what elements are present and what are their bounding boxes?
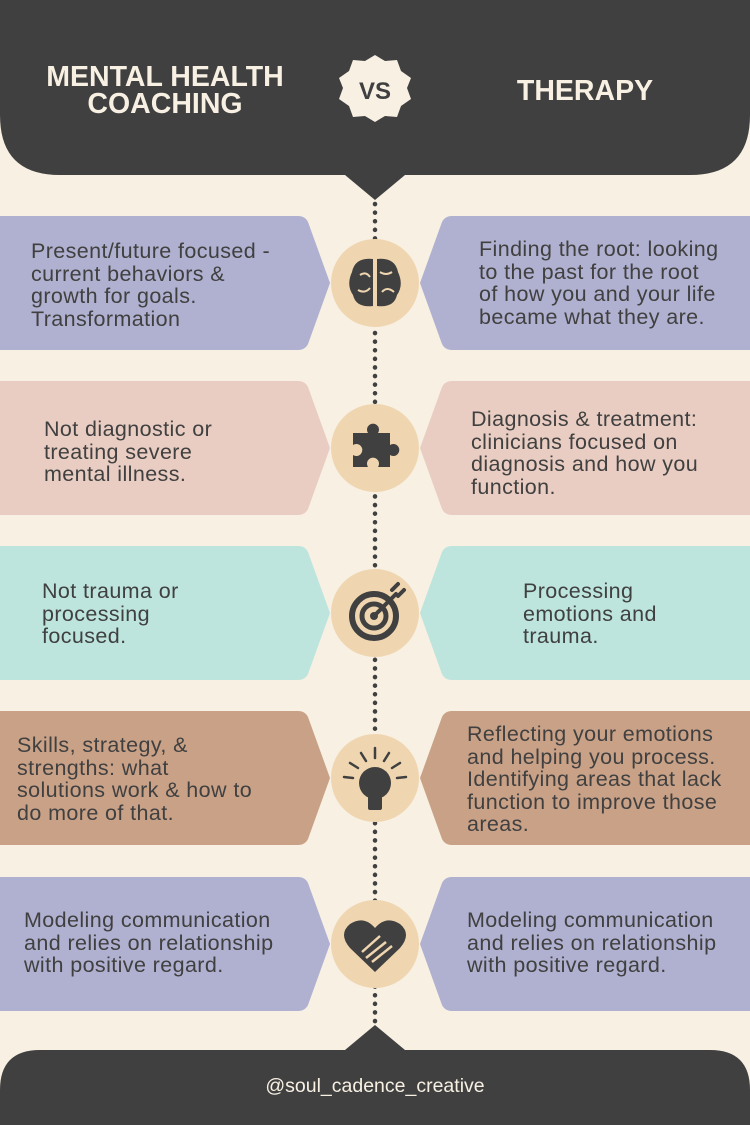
row4 left text: strengths: what xyxy=(17,756,169,780)
row2 right text: diagnosis and how you xyxy=(471,452,698,476)
row1 left text xyxy=(31,239,270,330)
row1 right text: Finding the root: looking xyxy=(479,237,718,261)
timeline dots xyxy=(373,204,377,1028)
vs badge: VS xyxy=(359,78,391,105)
row3 right text: Processing xyxy=(523,579,633,603)
row4 left text xyxy=(17,733,252,824)
row1 right text: became what they are. xyxy=(479,304,705,328)
row4 right text: Identifying areas that lack xyxy=(467,767,722,791)
row1 right text: of how you and your life xyxy=(479,282,716,306)
footer panel xyxy=(0,1025,750,1125)
vs badge xyxy=(339,55,411,122)
row2 right text: clinicians focused on xyxy=(471,430,678,454)
row3 right text: trauma. xyxy=(523,624,599,648)
title left xyxy=(46,61,284,120)
row3 left text: focused. xyxy=(42,624,126,648)
row2 panels xyxy=(0,381,750,515)
row5 right text xyxy=(467,908,716,977)
icon: puzzle xyxy=(331,404,419,492)
row5 right text: with positive regard. xyxy=(467,953,667,977)
row4 left text: do more of that. xyxy=(17,800,174,824)
row3 panels xyxy=(0,546,750,680)
row1 left text: Present/future focused - xyxy=(31,239,270,263)
row4 left text: Skills, strategy, & xyxy=(17,733,188,757)
row4 right text: Reflecting your emotions xyxy=(467,722,713,746)
row1 left text: current behaviors & xyxy=(31,262,225,286)
row4 panels xyxy=(0,711,750,845)
row2 right text: Diagnosis & treatment: xyxy=(471,407,697,431)
row1 right text xyxy=(479,237,718,328)
icon: target xyxy=(331,569,419,657)
row5 right text: Modeling communication xyxy=(467,908,714,932)
row5 left text: and relies on relationship xyxy=(24,930,273,954)
row3 right text: emotions and xyxy=(523,602,657,626)
row1 left text: growth for goals. xyxy=(31,284,197,308)
row1 right text: to the past for the root xyxy=(479,260,699,284)
row2 right text xyxy=(471,407,698,498)
footer panel: @soul_cadence_creative xyxy=(265,1075,485,1097)
row4 left text: solutions work & how to xyxy=(17,778,252,802)
icon: brain xyxy=(331,239,419,327)
row2 left text xyxy=(44,417,212,486)
row4 right text: areas. xyxy=(467,812,529,836)
row2 left text: mental illness. xyxy=(44,462,186,486)
title right: THERAPY xyxy=(517,75,653,107)
row1 panels xyxy=(0,216,750,350)
row4 right text: and helping you process. xyxy=(467,744,716,768)
row4 right text: function to improve those xyxy=(467,790,717,814)
row5 right text: and relies on relationship xyxy=(467,930,716,954)
title left: COACHING xyxy=(87,88,243,120)
row3 left text: processing xyxy=(42,602,150,626)
row5 left text: with positive regard. xyxy=(24,953,224,977)
title left: MENTAL HEALTH xyxy=(46,61,284,93)
row5 panels xyxy=(0,877,750,1011)
row1 left text: Transformation xyxy=(31,306,180,330)
row2 right text: function. xyxy=(471,474,556,498)
icon: heart handshake xyxy=(331,900,419,988)
row2 left text: treating severe xyxy=(44,440,192,464)
row5 left text: Modeling communication xyxy=(24,908,271,932)
icon: lightbulb xyxy=(331,734,419,822)
header panel xyxy=(0,0,750,200)
row4 right text xyxy=(467,722,722,836)
row3 left text: Not trauma or xyxy=(42,579,179,603)
row2 left text: Not diagnostic or xyxy=(44,417,212,441)
row3 left text xyxy=(42,579,179,648)
row5 left text xyxy=(24,908,273,977)
row3 right text xyxy=(523,579,657,648)
